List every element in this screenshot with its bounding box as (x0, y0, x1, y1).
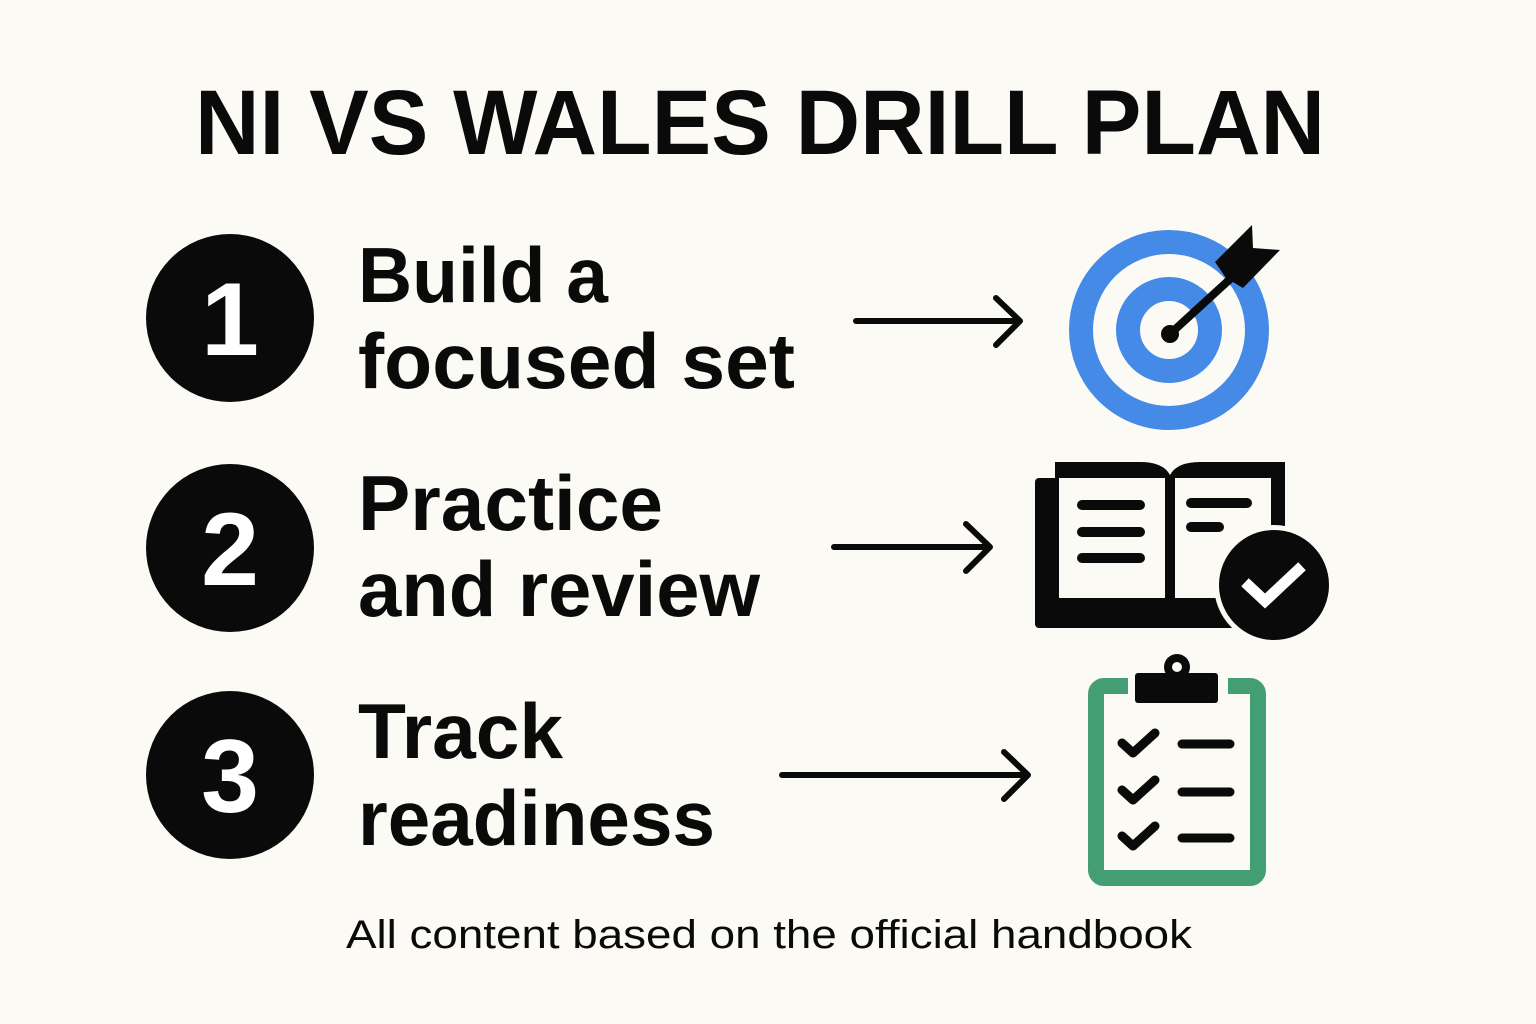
step 3 text: Track (358, 687, 564, 775)
footer note: All content based on the official handbook (346, 913, 1193, 957)
icon: target (1081, 225, 1280, 418)
step 1 text: Build a (358, 231, 609, 319)
step 2 (146, 459, 1334, 645)
step 2 text: and review (358, 545, 760, 633)
arrow 3 (782, 752, 1028, 799)
number badge 3: 3 (201, 719, 259, 835)
step 1 text: focused set (358, 317, 795, 405)
number badge 1 (146, 234, 314, 402)
number badge 2: 2 (201, 492, 259, 608)
number badge 1: 1 (201, 262, 259, 378)
step 3 (146, 654, 1258, 878)
arrow 2 (834, 524, 990, 571)
step 2 text (358, 459, 760, 633)
step 3 text: readiness (358, 774, 715, 862)
icon: book with check (1035, 462, 1334, 645)
step 2 text: Practice (358, 459, 663, 547)
step 1 text (358, 231, 795, 405)
title: NI VS WALES DRILL PLAN (195, 72, 1325, 174)
number badge 2 (146, 464, 314, 632)
step 1 (146, 225, 1280, 418)
number badge 3 (146, 691, 314, 859)
step 3 text (358, 687, 715, 862)
icon: clipboard checklist (1096, 654, 1258, 878)
arrow 1 (856, 298, 1020, 345)
